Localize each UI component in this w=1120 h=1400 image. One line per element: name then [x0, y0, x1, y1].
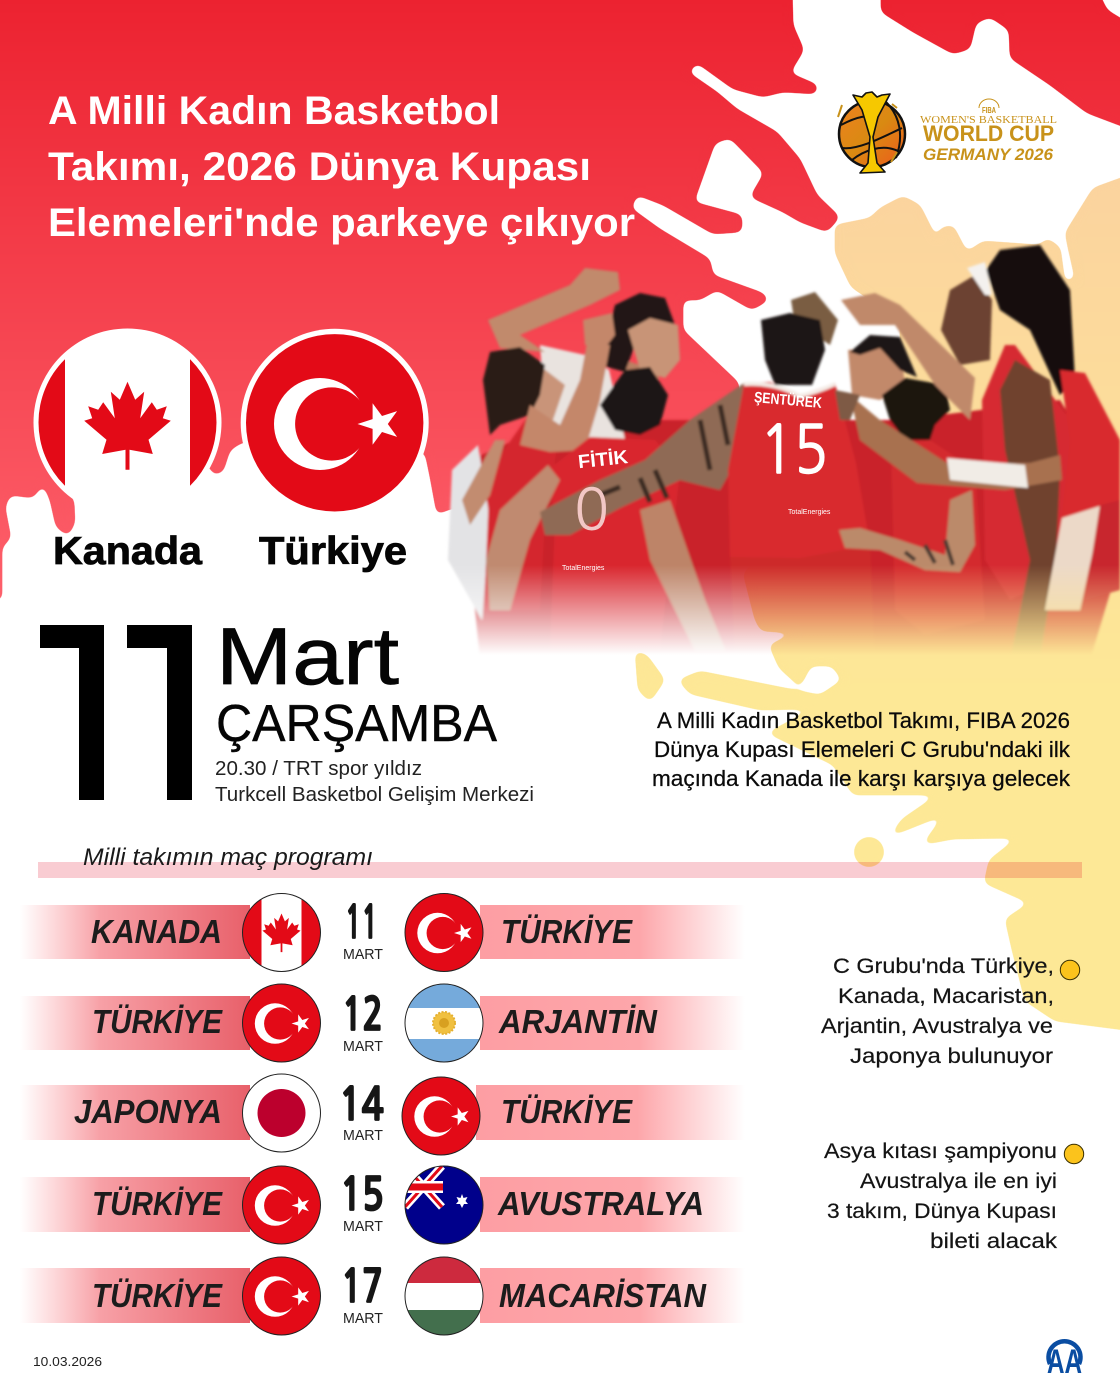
match row: Türkiye - Avustralya, 15 Mart: TÜRKİYE — [92, 1185, 223, 1222]
match row: Japonya - Türkiye, 14 Mart: 14 — [339, 1082, 384, 1127]
jersey lettering: FİTİK: FİTİK — [577, 447, 629, 473]
note: Asia champion and World Cup tickets: bileti alacak — [930, 1230, 1058, 1253]
jersey number 0: 0 — [574, 481, 609, 539]
logo wordmark — [920, 99, 1057, 164]
logo wordmark: WORLD CUP — [923, 121, 1054, 146]
match row: Türkiye - Macaristan, 17 Mart — [20, 1257, 745, 1335]
title — [48, 89, 635, 245]
logo wordmark: GERMANY 2026 — [923, 145, 1054, 164]
team name: Kanada: Kanada — [53, 530, 202, 573]
description text: maçında Kanada ile karşı karşıya gelecek — [652, 766, 1071, 791]
flag: Canada large — [34, 328, 222, 499]
note: group C teams: C Grubu'nda Türkiye, — [833, 955, 1054, 978]
logo: Anadolu Agency: AA — [1047, 1343, 1082, 1381]
logo: FIBA Women's Basketball World Cup — [838, 92, 1057, 173]
match row: Japonya - Türkiye, 14 Mart: JAPONYA — [74, 1093, 222, 1130]
team name: Türkiye: Türkiye — [259, 530, 407, 573]
title: Takımı, 2026 Dünya Kupası — [48, 145, 591, 189]
match venue: Turkcell Basketbol Gelişim Merkezi — [215, 783, 534, 806]
red paint splash background — [0, 0, 1120, 600]
flag: Türkiye large — [241, 329, 429, 517]
match row: Türkiye - Avustralya, 15 Mart: MART — [343, 1218, 383, 1235]
schedule heading band — [38, 862, 1082, 878]
note: group C teams: Japonya bulunuyor — [850, 1045, 1053, 1068]
peach and yellow paint splash background — [635, 171, 1120, 1032]
note: group C teams: Kanada, Macaristan, — [838, 985, 1054, 1008]
logo: Anadolu Agency — [1047, 1341, 1082, 1381]
note: group C teams — [821, 955, 1054, 1068]
icon: basketball with trophy — [838, 92, 905, 173]
match time and channel: 20.30 / TRT spor yıldız — [215, 757, 422, 780]
match row: Türkiye - Macaristan, 17 Mart: TÜRKİYE — [92, 1277, 223, 1314]
match row: Kanada - Türkiye, 11 Mart — [20, 893, 745, 972]
description text — [652, 708, 1071, 791]
note: Asia champion and World Cup tickets: 3 takım, Dünya Kupası — [827, 1200, 1057, 1223]
description text: Dünya Kupası Elemeleri C Grubu'ndaki ilk — [654, 737, 1071, 762]
team photo: players huddling — [448, 245, 1120, 665]
match row: Türkiye - Arjantin, 12 Mart: 12 — [342, 992, 383, 1037]
note: group C teams: Arjantin, Avustralya ve — [821, 1015, 1053, 1038]
publication date: 10.03.2026 — [33, 1355, 102, 1369]
match row: Türkiye - Macaristan, 17 Mart: 17 — [341, 1264, 383, 1309]
title: Elemeleri'nde parkeye çıkıyor — [48, 201, 635, 245]
icon: yellow bullet 1 — [1060, 960, 1080, 980]
match row: Türkiye - Macaristan, 17 Mart: MART — [343, 1310, 383, 1327]
match row: Japonya - Türkiye, 14 Mart — [20, 1074, 745, 1155]
icon: yellow bullet 2 — [1064, 1144, 1084, 1164]
match row: Türkiye - Avustralya, 15 Mart — [20, 1166, 745, 1244]
sponsor lettering: TotalEnergies — [788, 509, 831, 516]
match row: Kanada - Türkiye, 11 Mart: TÜRKİYE — [501, 913, 633, 950]
logo wordmark: WOMEN'S BASKETBALL — [920, 115, 1057, 126]
title: A Milli Kadın Basketbol — [48, 89, 500, 133]
note: Asia champion and World Cup tickets — [824, 1140, 1058, 1253]
sponsor lettering left: TotalEnergies — [562, 565, 605, 572]
match row: Türkiye - Avustralya, 15 Mart: AVUSTRALYA — [497, 1185, 704, 1222]
match row: Türkiye - Arjantin, 12 Mart — [20, 984, 745, 1062]
match row: Türkiye - Avustralya, 15 Mart: 15 — [340, 1172, 384, 1217]
match row: Kanada - Türkiye, 11 Mart: KANADA — [91, 913, 222, 950]
jersey number 15: 15 — [760, 417, 828, 483]
match weekday: ÇARŞAMBA: ÇARŞAMBA — [216, 695, 497, 753]
match row: Kanada - Türkiye, 11 Mart: MART — [343, 946, 383, 963]
note: Asia champion and World Cup tickets: Avustralya ile en iyi — [860, 1170, 1057, 1193]
match date: 11: 11 — [45, 608, 220, 841]
match row: Türkiye - Macaristan, 17 Mart: MACARİSTAN — [499, 1277, 707, 1314]
jersey lettering: ŞENTÜREK: ŞENTÜREK — [753, 389, 823, 412]
schedule heading: Milli takımın maç programı — [83, 844, 373, 871]
description text: A Milli Kadın Basketbol Takımı, FIBA 2026 — [657, 708, 1070, 733]
match row: Türkiye - Arjantin, 12 Mart: TÜRKİYE — [92, 1003, 223, 1040]
match row: Kanada - Türkiye, 11 Mart: 11 — [345, 900, 378, 945]
match month: Mart: Mart — [216, 612, 399, 702]
logo wordmark: FIBA — [982, 106, 996, 115]
match row: Türkiye - Arjantin, 12 Mart: ARJANTİN — [498, 1003, 658, 1040]
match row: Japonya - Türkiye, 14 Mart: TÜRKİYE — [501, 1093, 633, 1130]
note: Asia champion and World Cup tickets: Asya kıtası şampiyonu — [824, 1140, 1057, 1163]
match row: Türkiye - Arjantin, 12 Mart: MART — [343, 1038, 383, 1055]
match date: 11 — [40, 625, 192, 800]
match row: Japonya - Türkiye, 14 Mart: MART — [343, 1127, 383, 1144]
